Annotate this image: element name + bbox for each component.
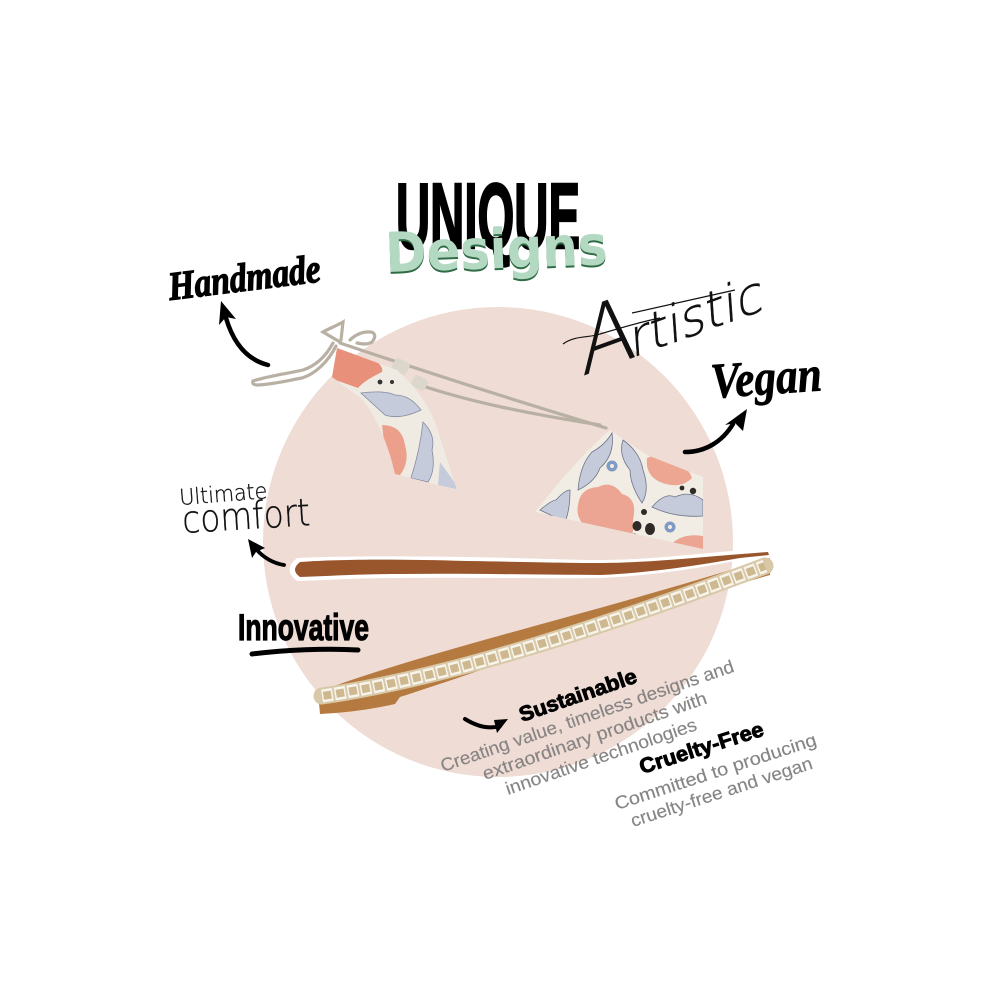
text block: Sustainable: innovative technologies — [503, 714, 699, 799]
label: Ultimate Comfort: comfort — [181, 490, 311, 542]
label: Handmade: Handmade — [165, 246, 323, 309]
text block: Cruelty-Free — [612, 718, 819, 831]
arrow: Sustainable — [465, 719, 508, 733]
title: Designs: Designs — [384, 213, 608, 285]
heel piece — [330, 345, 460, 490]
laces — [253, 322, 606, 428]
arrow: Handmade — [219, 301, 268, 365]
shoe illustration: insole strip — [290, 548, 773, 581]
label: Artistic: Artistic — [576, 227, 766, 397]
text block: Sustainable: Creating value, timeless designs and — [438, 656, 736, 776]
text block: Sustainable: extraordinary products with — [480, 688, 709, 784]
arrow: Vegan — [685, 409, 747, 452]
infographic — [169, 182, 821, 826]
title: Designs: Designs — [384, 215, 608, 287]
background circle — [263, 307, 733, 777]
lace toggles — [391, 357, 411, 376]
toe piece — [535, 430, 705, 552]
text block: Cruelty-Free: Cruelty-Free — [637, 718, 767, 779]
underline: Innovative — [252, 649, 358, 654]
shoe illustration: espadrille sole — [318, 558, 770, 714]
text block: Cruelty-Free: Committed to producing — [612, 730, 819, 814]
label: Ultimate Comfort: Ultimate — [179, 479, 268, 511]
label: Vegan: Vegan — [709, 345, 823, 409]
title: UNIQUE: UNIQUE — [396, 164, 580, 268]
arrow: Comfort — [248, 539, 284, 565]
text block: Sustainable: Sustainable — [516, 665, 640, 727]
label: Innovative: Innovative — [238, 607, 369, 648]
text block: Cruelty-Free: cruelty-free and vegan — [628, 753, 815, 831]
shoe illustration: upper with laces — [253, 322, 705, 552]
